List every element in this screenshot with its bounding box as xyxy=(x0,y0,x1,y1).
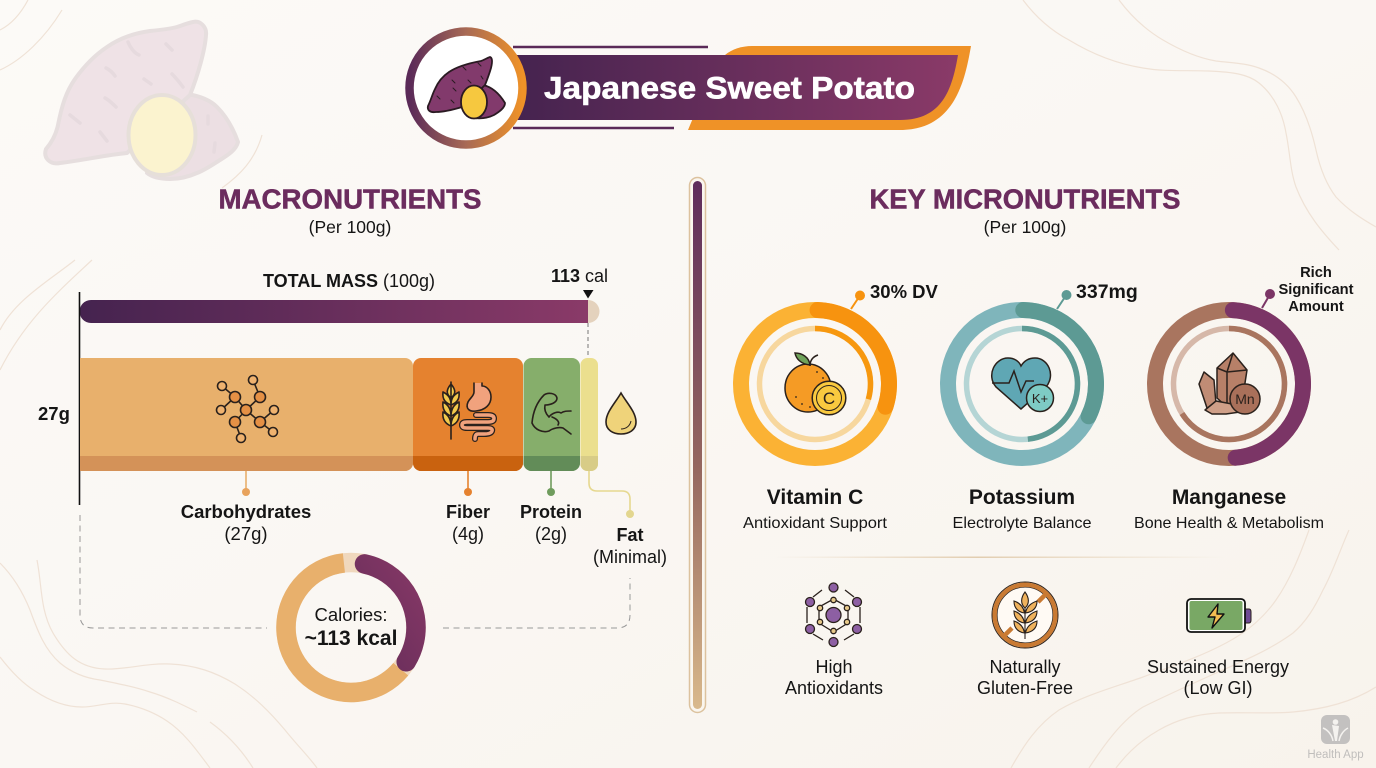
benefit: naturally gluten-free xyxy=(977,582,1073,698)
purple ribbon xyxy=(515,55,958,120)
icon: crossed wheat xyxy=(992,582,1058,648)
label: Naturally xyxy=(989,657,1061,677)
label: carbohydrates: (27g) xyxy=(224,523,268,544)
icon: molecule xyxy=(216,376,278,442)
title medallion xyxy=(410,32,522,144)
label: fiber: (4g) xyxy=(452,524,484,544)
total mass label: TOTAL MASS (100g) xyxy=(263,271,435,291)
name: Manganese xyxy=(1172,486,1286,509)
leader xyxy=(1057,290,1072,309)
label: fat: Fat xyxy=(616,525,644,545)
label: Gluten-Free xyxy=(977,678,1073,698)
macronutrient stacked bar chart xyxy=(38,266,667,567)
icon: heart xyxy=(992,358,1054,412)
icon: orange xyxy=(785,353,846,415)
micronutrient: potassium xyxy=(947,281,1138,532)
icon: antioxidant network xyxy=(806,583,862,646)
value: Amount xyxy=(1288,299,1344,315)
icon: orange: C xyxy=(823,389,835,408)
label: Antioxidants xyxy=(785,678,883,698)
value: Significant xyxy=(1278,282,1354,298)
heading: key micronutrients: (Per 100g) xyxy=(984,217,1066,237)
panel divider xyxy=(690,178,706,712)
description: Antioxidant Support xyxy=(743,515,888,532)
fiber segment xyxy=(413,358,523,471)
name: Vitamin C xyxy=(767,486,863,509)
icon: battery xyxy=(1187,599,1251,632)
ring gauge xyxy=(1151,306,1307,462)
carbohydrates segment xyxy=(80,358,413,471)
description: Bone Health & Metabolism xyxy=(1134,515,1324,532)
leader xyxy=(851,290,865,309)
total mass bar xyxy=(80,300,600,323)
leader: carbohydrates xyxy=(242,471,250,496)
label: protein: Protein xyxy=(520,502,582,522)
title text: Japanese Sweet Potato xyxy=(544,70,915,106)
micronutrient: vitamin C xyxy=(738,281,939,532)
label: carbohydrates: Carbohydrates xyxy=(181,501,311,522)
heading: macronutrients xyxy=(218,184,482,237)
label: fiber: Fiber xyxy=(446,502,490,522)
ring gauge xyxy=(947,309,1097,459)
heading: macronutrients: (Per 100g) xyxy=(309,217,391,237)
calorie donut chart: ~113 kcal xyxy=(305,627,397,650)
leader xyxy=(1262,289,1275,308)
dashed connectors xyxy=(80,515,630,628)
name: Potassium xyxy=(969,486,1075,509)
icon: muscle arm xyxy=(532,393,571,434)
leader: fiber xyxy=(464,471,472,496)
icon: heart: K+ xyxy=(1032,391,1048,406)
heading: key micronutrients xyxy=(870,184,1180,237)
label: fat: (Minimal) xyxy=(593,547,667,567)
orange banner backing xyxy=(688,46,971,130)
marker triangle xyxy=(583,290,594,298)
protein segment xyxy=(524,358,580,471)
value: 30% DV xyxy=(870,281,939,302)
ring gauge xyxy=(738,307,892,461)
fat segment xyxy=(580,358,598,471)
label: (Low GI) xyxy=(1183,678,1253,698)
value: 337mg xyxy=(1076,281,1138,303)
icon: wheat and gut xyxy=(443,382,494,439)
calorie donut chart xyxy=(259,536,443,719)
value: Rich xyxy=(1300,265,1332,281)
description: Electrolyte Balance xyxy=(952,515,1092,532)
icon: crystals xyxy=(1199,353,1260,414)
label: Sustained Energy xyxy=(1147,657,1289,677)
benefit: sustained energy xyxy=(1147,599,1289,698)
leader: protein xyxy=(547,471,555,496)
y label: 27g xyxy=(38,403,70,424)
icon: oil drop xyxy=(606,393,636,434)
leader: fat xyxy=(589,471,634,518)
heading: macronutrients: MACRONUTRIENTS xyxy=(218,184,482,214)
heading: key micronutrients: KEY MICRONUTRIENTS xyxy=(870,184,1180,214)
label: High xyxy=(815,657,853,677)
donut label: Calories: xyxy=(314,604,388,625)
label: protein: (2g) xyxy=(535,524,567,544)
banner accent lines xyxy=(513,47,708,128)
benefit: high antioxidants xyxy=(785,583,883,698)
title banner xyxy=(410,32,971,144)
watermark: sweet potato xyxy=(45,22,238,179)
calorie marker label: 113 cal xyxy=(551,266,608,286)
micronutrient: manganese xyxy=(1134,265,1354,532)
axis xyxy=(78,292,80,505)
icon: crystals: Mn xyxy=(1235,391,1255,407)
watermark: health app: Health App xyxy=(1307,749,1364,761)
watermark: health app xyxy=(1307,715,1364,761)
